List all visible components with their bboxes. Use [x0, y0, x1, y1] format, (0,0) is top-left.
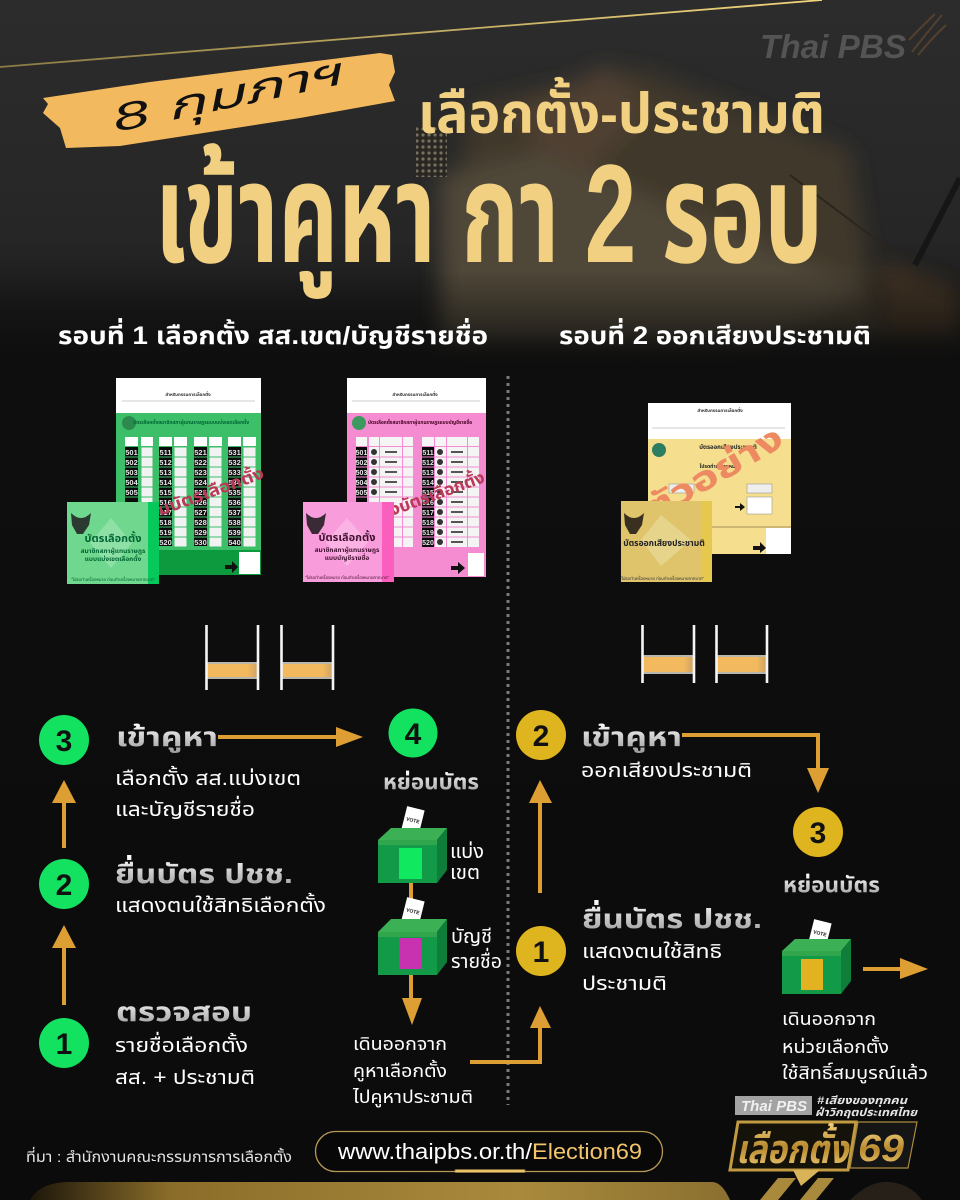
title: [155, 76, 825, 299]
exit text right: ใช้สิทธิ์สมบูรณ์แล้ว: [782, 1062, 928, 1085]
icon: ballot box party list: VOTE: [405, 907, 421, 917]
referendum step 2: enter booth: เข้าคูหา: [581, 722, 682, 753]
logo: Thai PBS election 69: Thai PBS: [741, 1098, 807, 1115]
exit text left: [352, 1034, 473, 1109]
arrow: referendum up: [529, 780, 552, 893]
step 1: check list: สส. + ประชามติ: [115, 1067, 255, 1089]
pink ballot: [347, 378, 487, 577]
green ballot: 533: [228, 468, 241, 477]
green ballot: 505: [125, 488, 138, 497]
pink ballot: 502: [356, 460, 367, 467]
heading: round 1: รอบที่ 1 เลือกตั้ง สส.เขต/บัญชีรายชื่อ: [58, 318, 488, 350]
dotted divider: [506, 376, 510, 1105]
green ballot: 522: [194, 458, 207, 467]
green ballot: 501: [125, 448, 138, 457]
referendum step 2: enter booth: [516, 710, 752, 782]
exit text left: เดินออกจาก: [353, 1034, 447, 1054]
icon: ballot box party list: [378, 897, 447, 975]
yellow referendum ballot: ตัวอย่าง: [637, 419, 790, 529]
logo: Thai PBS election 69: #เสียงของทุกคน: [817, 1095, 908, 1107]
url pill: www.thaipbs.or.th/: [337, 1139, 533, 1164]
yellow booklet: บัตรออกเสียงประชามติ: [623, 538, 705, 548]
pink ballot: 511: [422, 450, 434, 457]
pink ballot: บัตรเลือกตั้งสมาชิกสภาผู้แทนราษฎรแบบบัญชีรายชื่อ: [368, 418, 472, 426]
step 1: check list: ตรวจสอบ: [116, 997, 252, 1027]
green ballot: 514: [159, 478, 173, 487]
pink ballot: 504: [356, 480, 367, 487]
pink ballot: 501: [356, 450, 367, 457]
step 3: enter booth: และบัญชีรายชื่อ: [115, 795, 255, 821]
referendum step 1: show ID: ยื่นบัตร ปชช.: [582, 900, 762, 934]
pink ballot: 519: [422, 530, 434, 537]
green ballot: 528: [194, 518, 207, 527]
green ballot: 523: [194, 468, 207, 477]
pink booklet: สมาชิกสภาผู้แทนราษฎร: [315, 546, 380, 554]
label: district: แบ่ง: [450, 840, 484, 863]
pink ballot: 513: [422, 470, 434, 477]
url pill: [316, 1132, 662, 1172]
watermark: Thai PBS logo: Thai PBS: [760, 28, 906, 65]
yellow referendum ballot: บัตรออกเสียงประชามติ: [699, 444, 757, 451]
referendum step 3: cast: [783, 807, 880, 897]
watermark: Thai PBS logo: [760, 14, 946, 65]
exit text left: คูหาเลือกตั้ง: [353, 1059, 447, 1083]
pink ballot: 505: [356, 490, 367, 497]
yellow referendum ballot: สำหรับกรรมการเลือกตั้ง: [697, 407, 743, 413]
icon: ballot box referendum: [782, 919, 851, 994]
icon: voting booths left: [206, 625, 333, 690]
date tape: [43, 51, 395, 148]
green ballot: 511: [159, 448, 172, 457]
pink ballot: งบัตรเลือกตั้ง: [386, 465, 487, 520]
logo: Thai PBS election 69: [730, 1095, 918, 1186]
arrow: to referendum: [470, 1006, 551, 1062]
icon: ballot box district: VOTE: [405, 816, 421, 826]
pink ballot: สำหรับกรรมการเลือกตั้ง: [392, 391, 438, 397]
bottom gold bar: [30, 1178, 922, 1200]
green ballot: 530: [194, 538, 207, 547]
title: เลือกตั้ง-ประชามติ: [418, 76, 825, 145]
green ballot: [116, 378, 267, 575]
step 3: enter booth: เข้าคูหา: [116, 722, 218, 753]
logo: Thai PBS election 69: ฝ่าวิกฤตประเทศไทย: [815, 1106, 918, 1119]
referendum step 3: cast: หย่อนบัตร: [783, 874, 880, 897]
green ballot: 526: [194, 498, 207, 507]
pink ballot: 515: [422, 490, 434, 497]
green ballot: 527: [194, 508, 207, 517]
yellow referendum ballot: โปรดทำเครื่องหมาย: [700, 462, 740, 470]
green ballot: 512: [159, 458, 172, 467]
green booklet: สมาชิกสภาผู้แทนราษฎร: [81, 547, 146, 555]
green ballot: มบัตรเลือกตั้ง: [154, 461, 267, 520]
arrow: booth to cast: [682, 735, 829, 793]
step 3: enter booth: เลือกตั้ง สส.แบ่งเขต: [115, 765, 301, 790]
icon: ballot box referendum: VOTE: [812, 929, 828, 939]
referendum step 1: show ID: ประชามติ: [582, 973, 667, 995]
pink booklet: [303, 502, 394, 582]
green ballot: 540: [228, 538, 241, 547]
green ballot: 531: [228, 448, 241, 457]
step 2: show ID: 2: [56, 869, 72, 902]
green ballot: 529: [194, 528, 207, 537]
arrows: left column up: [52, 780, 76, 1005]
icon: voting booths right: [642, 625, 768, 683]
green ballot: 534: [228, 478, 242, 487]
pink booklet: "โปรดทำเครื่องหมาย ก่อนทำเครื่องหมายกากบาท": [305, 574, 389, 580]
source: ที่มา : สำนักงานคณะกรรมการการเลือกตั้ง: [26, 1146, 292, 1166]
pink ballot: 514: [422, 480, 434, 487]
label: party list: [451, 926, 502, 973]
green ballot: สำหรับกรรมการเลือกตั้ง: [165, 391, 211, 397]
green ballot: 536: [228, 498, 241, 507]
exit text right: [782, 1009, 928, 1085]
arrow: step 3 to step 4: [218, 727, 363, 747]
step 1: check list: 1: [56, 1028, 72, 1061]
step 4: cast ballots: หย่อนบัตร: [383, 771, 479, 794]
green ballot: 521: [194, 448, 207, 457]
icon: ballot box district: [378, 806, 447, 883]
green booklet: แบบแบ่งเขตเลือกตั้ง: [85, 554, 141, 563]
arrow between ballot boxes and exit: [402, 880, 422, 1025]
exit text left: ไปคูหาประชามติ: [352, 1087, 473, 1109]
green ballot: 503: [125, 468, 138, 477]
step 2: show ID: [39, 855, 326, 917]
pink ballot: 518: [422, 520, 434, 527]
label: district: เขต: [450, 862, 480, 884]
step 1: check list: [39, 997, 255, 1089]
logo: Thai PBS election 69: 69: [858, 1128, 904, 1170]
green ballot: 537: [228, 508, 241, 517]
referendum step 3: cast: 3: [810, 817, 826, 850]
label: district: [450, 840, 484, 884]
exit text right: เดินออกจาก: [782, 1009, 876, 1029]
green ballot: 518: [159, 518, 172, 527]
step 1: check list: รายชื่อเลือกตั้ง: [115, 1031, 248, 1057]
pink ballot: 517: [422, 510, 434, 517]
referendum step 1: show ID: [516, 900, 762, 995]
referendum step 2: enter booth: ออกเสียงประชามติ: [581, 760, 752, 782]
exit text right: หน่วยเลือกตั้ง: [782, 1035, 889, 1057]
green ballot: 515: [159, 488, 172, 497]
step 2: show ID: แสดงตนใช้สิทธิเลือกตั้ง: [115, 892, 326, 917]
green ballot: 504: [125, 478, 139, 487]
logo: Thai PBS election 69: เลือกตั้ง: [736, 1122, 850, 1172]
green ballot: 532: [228, 458, 241, 467]
green ballot: 520: [159, 538, 172, 547]
pink booklet: บัตรเลือกตั้ง: [318, 529, 376, 544]
green ballot: 539: [228, 528, 241, 537]
green ballot: 502: [125, 458, 138, 467]
green booklet: [67, 502, 159, 584]
green ballot: 524: [194, 478, 208, 487]
heading: round 2: รอบที่ 2 ออกเสียงประชามติ: [559, 318, 871, 350]
label: party list: บัญชี: [451, 926, 492, 948]
green ballot: 513: [159, 468, 172, 477]
step 2: show ID: ยื่นบัตร ปชช.: [115, 855, 293, 889]
green ballot: บัตรเลือกตั้งสมาชิกสภาผู้แทนราษฎรแบบแบ่งเขตเลือกตั้ง: [133, 418, 249, 426]
pink booklet: แบบบัญชีรายชื่อ: [325, 553, 369, 562]
step 3: enter booth: [39, 715, 301, 821]
green ballot: 516: [159, 498, 172, 507]
referendum step 1: show ID: 1: [533, 936, 549, 969]
arrow: exit: [863, 958, 928, 979]
url pill: Election69: [532, 1139, 642, 1164]
step 4: cast ballots: 4: [405, 718, 422, 751]
pink ballot: 503: [356, 470, 367, 477]
pink ballot: 520: [422, 540, 434, 547]
yellow booklet: "โปรดทำเครื่องหมาย ก่อนทำเครื่องหมายกากบาท": [620, 575, 704, 581]
pink ballot: 512: [422, 460, 434, 467]
green ballot: 519: [159, 528, 172, 537]
yellow booklet: [620, 501, 712, 582]
step 4: cast ballots: [383, 708, 479, 794]
referendum step 2: enter booth: 2: [533, 720, 549, 753]
gold diagonal line: [0, 0, 822, 67]
pink ballot: 516: [422, 500, 434, 507]
label: party list: รายชื่อ: [451, 947, 502, 973]
green ballot: 525: [194, 488, 207, 497]
green booklet: บัตรเลือกตั้ง: [84, 530, 142, 545]
green booklet: "โปรดทำเครื่องหมาย ก่อนทำเครื่องหมายกากบาท": [71, 576, 155, 582]
step 3: enter booth: 3: [56, 725, 72, 758]
green ballot: 517: [159, 508, 172, 517]
referendum step 1: show ID: แสดงตนใช้สิทธิ: [582, 940, 722, 963]
yellow referendum ballot: [637, 403, 791, 554]
green ballot: 538: [228, 518, 241, 527]
date tape: 8 กุมภาฯ: [109, 51, 349, 142]
green ballot: 535: [228, 488, 241, 497]
